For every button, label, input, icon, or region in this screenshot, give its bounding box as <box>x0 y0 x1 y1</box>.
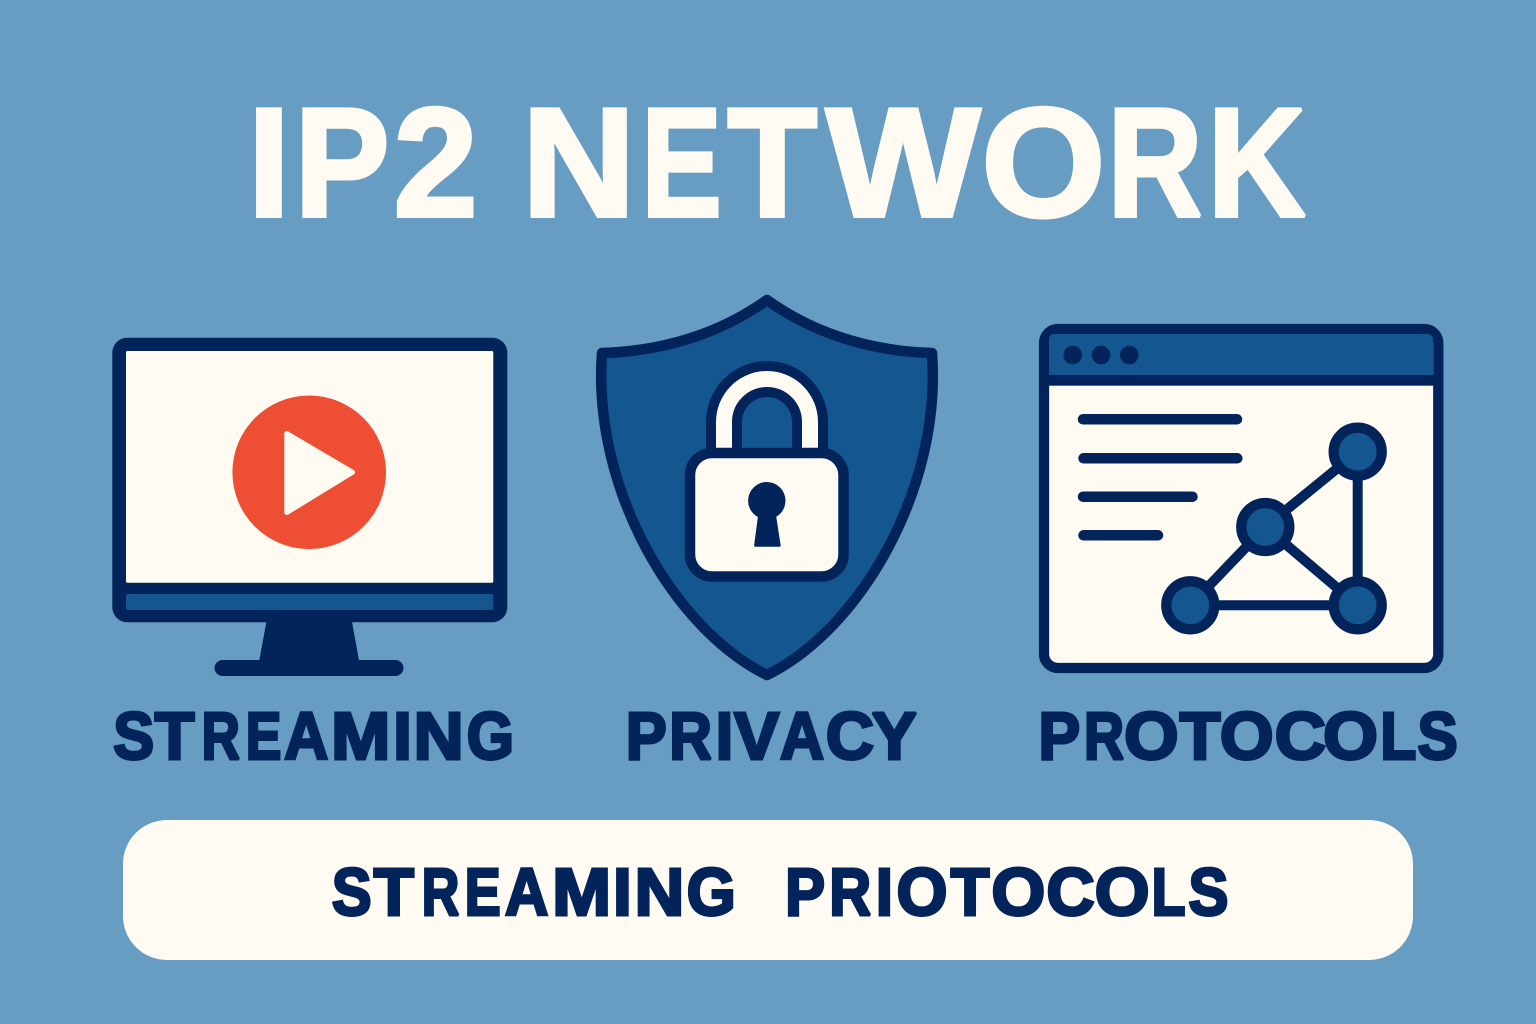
banner text: S <box>332 856 372 930</box>
title: P <box>295 76 390 249</box>
label: streaming: T <box>155 700 194 774</box>
banner text: I <box>876 856 893 930</box>
label: protocols: O <box>1220 700 1274 774</box>
title: I <box>248 76 290 249</box>
banner text: E <box>465 856 501 930</box>
label: streaming: E <box>246 700 281 774</box>
label: protocols: O <box>1124 700 1179 774</box>
label: protocols: L <box>1380 700 1416 774</box>
label: privacy: R <box>669 700 712 774</box>
label: privacy: P <box>626 700 667 774</box>
label: protocols: T <box>1180 700 1220 774</box>
title: K <box>1208 76 1306 249</box>
banner text: O <box>992 856 1045 930</box>
label: protocols: O <box>1323 700 1378 774</box>
label: privacy: V <box>734 700 779 774</box>
label: streaming: N <box>414 700 464 774</box>
label: streaming: G <box>467 700 514 774</box>
title: W <box>826 76 981 249</box>
banner text: G <box>687 856 736 930</box>
title: 2 <box>394 76 478 249</box>
label: protocols: P <box>1038 700 1080 774</box>
label: privacy: C <box>826 700 874 774</box>
banner text: I <box>613 856 632 930</box>
banner text: M <box>552 856 611 930</box>
icon: browser window with network graph <box>1044 329 1438 668</box>
label: protocols: C <box>1275 700 1326 774</box>
label: privacy: I <box>716 700 733 774</box>
title: N <box>522 76 635 249</box>
banner text: O <box>1095 856 1150 930</box>
title: E <box>642 76 722 249</box>
banner <box>123 820 1413 960</box>
banner text: A <box>505 856 548 930</box>
banner text: R <box>422 856 459 930</box>
banner text: L <box>1152 856 1185 930</box>
title: R <box>1108 76 1202 249</box>
title: O <box>981 76 1105 249</box>
label: privacy: Y <box>872 700 917 774</box>
label: protocols: S <box>1418 700 1458 774</box>
icon: monitor with play button <box>112 338 507 676</box>
label: streaming: S <box>113 700 154 774</box>
label: privacy: A <box>780 700 824 774</box>
label: streaming: I <box>393 700 412 774</box>
label: protocols: R <box>1084 700 1124 774</box>
label: streaming: R <box>202 700 240 774</box>
banner text: R <box>829 856 871 930</box>
title: T <box>728 76 817 249</box>
label: streaming: M <box>331 700 390 774</box>
banner text: P <box>785 856 825 930</box>
banner text: N <box>635 856 684 930</box>
banner text: O <box>897 856 947 930</box>
label: streaming: A <box>284 700 328 774</box>
banner text: C <box>1046 856 1095 930</box>
icon: shield with padlock <box>601 300 933 675</box>
banner text: S <box>1188 856 1228 930</box>
banner text: T <box>951 856 989 930</box>
banner text: T <box>374 856 414 930</box>
